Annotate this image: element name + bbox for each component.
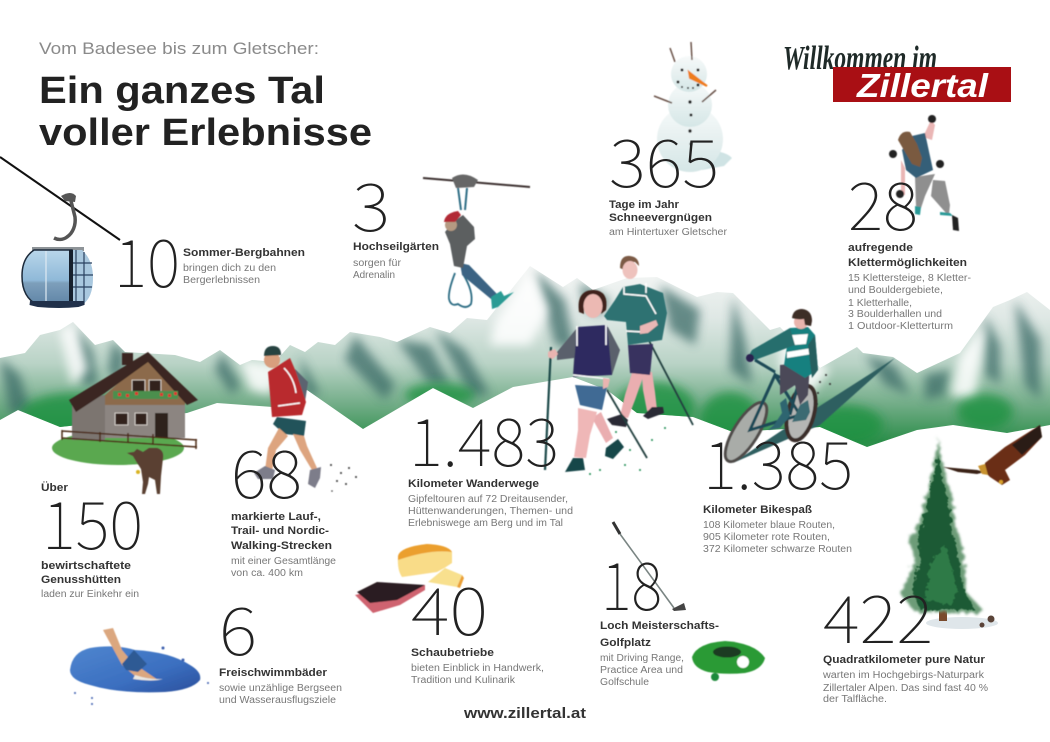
- number: 365: 365: [609, 111, 719, 207]
- website url: www.zillertal.at: [463, 705, 586, 722]
- text: Schaubetriebe: [411, 647, 544, 686]
- text: Wanderwege: Kilometer Wanderwege: [408, 478, 539, 490]
- icon: cheese and bacon: [355, 544, 464, 613]
- icon: swimmer in lake: [70, 628, 209, 705]
- text: Genusshütten: Genusshütten: [41, 574, 121, 586]
- text: Sommer-Bergbahnen: Sommer-Bergbahnen: [183, 247, 305, 259]
- mountain panorama: [0, 260, 1050, 450]
- text: Hochseilgärten: sorgen für: [353, 258, 402, 269]
- title: [39, 70, 372, 154]
- text: Golfplatz: Practice Area und: [600, 665, 683, 676]
- logo: Willkommen im: [783, 40, 937, 77]
- number: 150: 150: [42, 473, 143, 569]
- number: 422: 422: [823, 567, 933, 663]
- text: Klettermöglichkeiten: [848, 242, 971, 332]
- text: Wanderwege: [408, 478, 573, 529]
- number: 40: 40: [411, 559, 488, 655]
- text: Klettermöglichkeiten: Klettermöglichkeiten: [848, 257, 967, 269]
- text: Laufstrecken: [231, 511, 336, 579]
- text: Golfplatz: Golfschule: [600, 677, 649, 688]
- text: Schaubetriebe: Schaubetriebe: [411, 647, 494, 659]
- text: Bikespaß: [703, 504, 852, 555]
- text: Freischwimmbäder: [219, 667, 342, 706]
- icon: snowman: [654, 42, 732, 172]
- text: Schneevergnügen: [609, 199, 728, 238]
- text: pure Natur: der Talfläche.: [823, 694, 887, 705]
- text: Sommer-Bergbahnen: Bergerlebnissen: [183, 275, 260, 286]
- text: Genusshütten: bewirtschaftete: [41, 560, 131, 572]
- text: Hochseilgärten: Hochseilgärten: [353, 241, 439, 253]
- text: Bikespaß: 905 Kilometer rote Routen,: [703, 532, 830, 543]
- number: 10: 10: [114, 211, 180, 307]
- text: Golfplatz: mit Driving Range,: [600, 653, 684, 664]
- icon: golf green: [692, 641, 765, 681]
- text: pure Natur: [822, 654, 988, 705]
- number: 1.483: 1.483: [409, 390, 559, 486]
- text: Laufstrecken: von ca. 400 km: [231, 568, 303, 579]
- text: Klettermöglichkeiten: und Bouldergebiete,: [848, 285, 943, 296]
- icon: golf club: [613, 522, 686, 611]
- text: Wanderwege: Erlebniswege am Berg und im Tal: [408, 518, 563, 529]
- text: Über 150 label: Über: [41, 481, 69, 494]
- text: Klettermöglichkeiten: aufregende: [848, 242, 913, 254]
- text: Laufstrecken: Walking-Strecken: [231, 540, 332, 552]
- icon: hikers: [545, 256, 693, 475]
- text: Schneevergnügen: Tage im Jahr: [609, 199, 680, 211]
- text: Hochseilgärten: [353, 241, 439, 281]
- man behind: [604, 256, 693, 427]
- text: Wanderwege: Gipfeltouren auf 72 Dreitausender,: [408, 494, 568, 505]
- text: Freischwimmbäder: Freischwimmbäder: [219, 667, 328, 679]
- number: 18: 18: [601, 534, 662, 630]
- text: Sommer-Bergbahnen: bringen dich zu den: [183, 263, 276, 274]
- icon: eagle: [943, 425, 1042, 485]
- icon: fir tree: [900, 438, 998, 629]
- title: Ein ganzes Tal: [39, 70, 325, 112]
- logo: Zillertal: [856, 67, 989, 104]
- icon: gondola: [0, 157, 120, 306]
- text: Klettermöglichkeiten: 15 Klettersteige, 8 Kletter-: [848, 273, 971, 284]
- number: 3: 3: [352, 155, 390, 251]
- text: Laufstrecken: Trail- und Nordic-: [231, 525, 329, 537]
- text: Hochseilgärten: Adrenalin: [353, 270, 395, 281]
- text: Bikespaß: 372 Kilometer schwarze Routen: [703, 544, 852, 555]
- text: Freischwimmbäder: sowie unzählige Bergseen: [219, 683, 342, 694]
- text: Golfplatz: [600, 620, 719, 688]
- icon: runner: [254, 346, 357, 492]
- number: 6: 6: [219, 579, 257, 675]
- ground speckles: [589, 427, 666, 475]
- icon: cow: [127, 448, 163, 494]
- text: Wanderwege: Hüttenwanderungen, Themen- und: [408, 506, 573, 517]
- number: 28: 28: [848, 154, 918, 250]
- text: Klettermöglichkeiten: 1 Outdoor-Kletterturm: [848, 321, 953, 332]
- icon: mountain hut: [52, 352, 198, 465]
- text: Laufstrecken: markierte Lauf-,: [231, 511, 321, 523]
- text: Schaubetriebe: Tradition und Kulinarik: [411, 675, 516, 686]
- text: pure Natur: Zillertaler Alpen. Das sind fast 40 %: [823, 683, 988, 694]
- title: voller Erlebnisse: [39, 112, 372, 154]
- text: Schneevergnügen: am Hintertuxer Gletscher: [609, 227, 728, 238]
- text: Schaubetriebe: bieten Einblick in Handwerk,: [411, 663, 544, 674]
- icon: zipline climber: [423, 174, 530, 309]
- text: Bikespaß: 108 Kilometer blaue Routen,: [703, 520, 835, 531]
- number: 68: 68: [231, 422, 302, 518]
- text: Golfplatz: Golfplatz: [600, 637, 652, 649]
- woman front: [545, 290, 647, 472]
- text: Laufstrecken: mit einer Gesamtlänge: [231, 556, 336, 567]
- text: Genusshütten: laden zur Einkehr ein: [41, 589, 139, 600]
- logo: [783, 40, 1011, 104]
- text: Klettermöglichkeiten: 3 Boulderhallen und: [848, 309, 942, 320]
- text: pure Natur: Quadratkilometer pure Natur: [823, 654, 986, 666]
- text: Freischwimmbäder: und Wasserausflugsziele: [219, 695, 336, 706]
- icon: mountain biker: [718, 309, 895, 467]
- text: Golfplatz: Loch Meisterschafts-: [600, 620, 719, 632]
- text: Klettermöglichkeiten: 1 Kletterhalle,: [848, 298, 912, 309]
- number: 1.385: 1.385: [703, 413, 853, 509]
- icon: rock climber: [889, 115, 959, 231]
- text: Bikespaß: Kilometer Bikespaß: [703, 504, 812, 516]
- text: Schneevergnügen: Schneevergnügen: [609, 212, 712, 224]
- subtitle: Vom Badesee bis zum Gletscher:: [39, 39, 319, 58]
- text: Genusshütten: [41, 560, 139, 600]
- text: pure Natur: warten im Hochgebirgs-Naturpark: [822, 670, 985, 681]
- text: Sommer-Bergbahnen: [183, 247, 305, 286]
